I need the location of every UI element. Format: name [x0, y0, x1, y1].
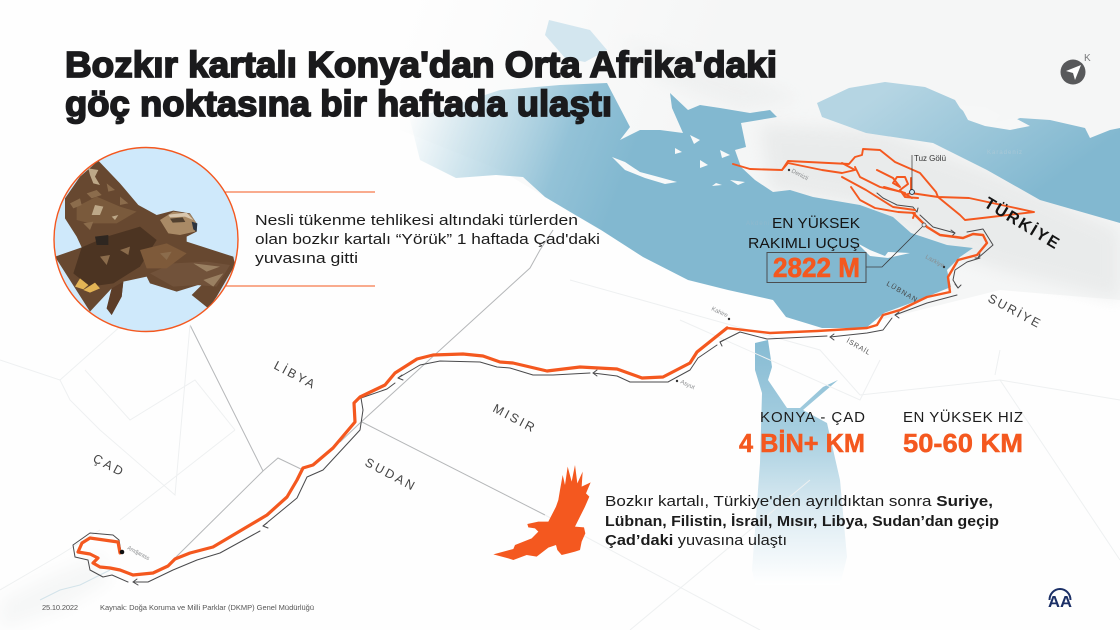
sea: Mediterranean and Aegean — [410, 83, 973, 328]
date: 25.10.2022 — [42, 603, 78, 612]
text block: eagle description: Nesli tükenme tehlikesi altındaki türlerden — [255, 212, 578, 229]
map labels: cities and seas: Akdeniz — [746, 221, 774, 227]
end point dot — [120, 550, 124, 554]
title: Bozkır kartalı Konya'dan Orta Afrika'daki — [65, 44, 777, 85]
stat: top speed — [903, 408, 1023, 458]
country label: Sudan: SUDAN — [363, 455, 417, 493]
eagle photo in circle — [54, 148, 238, 332]
text block: countries crossed: Çad’daki yuvasına ulaştı — [605, 533, 787, 549]
map labels: cities and seas: Denizli — [790, 168, 809, 182]
sea: Red Sea and gulfs — [752, 340, 847, 585]
sea: Adriatic — [545, 20, 607, 62]
Crimea — [960, 105, 1030, 130]
title — [65, 44, 777, 124]
Tuz Gölü marker: Tuz Gölü — [914, 154, 946, 163]
Tuz Gölü marker — [910, 154, 946, 194]
stat: top speed: EN YÜKSEK HIZ — [903, 408, 1023, 426]
country borders — [0, 230, 1120, 630]
text block: eagle description: yuvasına gitti — [255, 250, 358, 267]
callout: highest altitude flight: RAKIMLI UÇUŞ — [748, 235, 860, 252]
map labels: cities and seas: Asyut — [679, 379, 696, 391]
country label: Çad: ÇAD — [91, 451, 125, 479]
map labels: cities and seas: Amdjarass — [126, 545, 150, 562]
compass icon — [1060, 53, 1091, 84]
map labels: cities and seas: Kahire — [710, 306, 729, 319]
country label: Mısır: MISIR — [491, 401, 537, 435]
source: Kaynak: Doğa Koruma ve Milli Parklar (DKMP) Genel Müdürlüğü — [100, 603, 314, 612]
map labels: cities and seas — [126, 150, 1023, 562]
sea: Black Sea — [817, 82, 1120, 223]
map labels: cities and seas: Karadeniz — [987, 150, 1023, 156]
country label: Türkiye: TÜRKİYE — [981, 193, 1063, 253]
islands — [612, 135, 910, 258]
country label: Lübnan: LÜBNAN — [885, 280, 918, 304]
arrowheads — [133, 208, 980, 585]
stat: Konya - Çad distance — [739, 409, 865, 458]
title: göç noktasına bir haftada ulaştı — [65, 83, 612, 124]
text block: countries crossed: Lübnan, Filistin, İsrail, Mısır, Libya, Sudan’dan geçip — [605, 513, 999, 530]
route: returning grey-black trace with arrows — [73, 193, 993, 585]
stat: top speed: 50-60 KM — [903, 428, 1023, 458]
route: orange flight path — [78, 149, 1034, 575]
country label: İsrail: İSRAİL — [845, 336, 872, 357]
text block: countries crossed: Bozkır kartalı, Türkiye'den ayrıldıktan sonra Suriye, — [605, 494, 993, 510]
callout: highest altitude flight: 2822 M — [773, 252, 860, 283]
AA logo: AA — [1048, 594, 1072, 611]
text block: eagle description — [255, 212, 600, 267]
callout: highest altitude flight — [748, 214, 926, 283]
compass icon: K — [1084, 53, 1091, 64]
text block: eagle description: olan bozkır kartalı “Yörük” 1 haftada Çad'daki — [255, 231, 600, 248]
callout: highest altitude flight: EN YÜKSEK — [772, 214, 860, 232]
stat: Konya - Çad distance: KONYA - ÇAD — [760, 409, 865, 426]
icon: orange eagle silhouette — [493, 465, 591, 560]
connector lines from photo — [225, 192, 375, 286]
stat: Konya - Çad distance: 4 BİN+ KM — [739, 428, 865, 458]
text block: countries crossed — [605, 494, 999, 549]
country label: Libya: LİBYA — [272, 358, 318, 392]
map labels: cities and seas: Lazkiye — [924, 254, 945, 270]
country label: Suriye: SURİYE — [986, 291, 1042, 330]
